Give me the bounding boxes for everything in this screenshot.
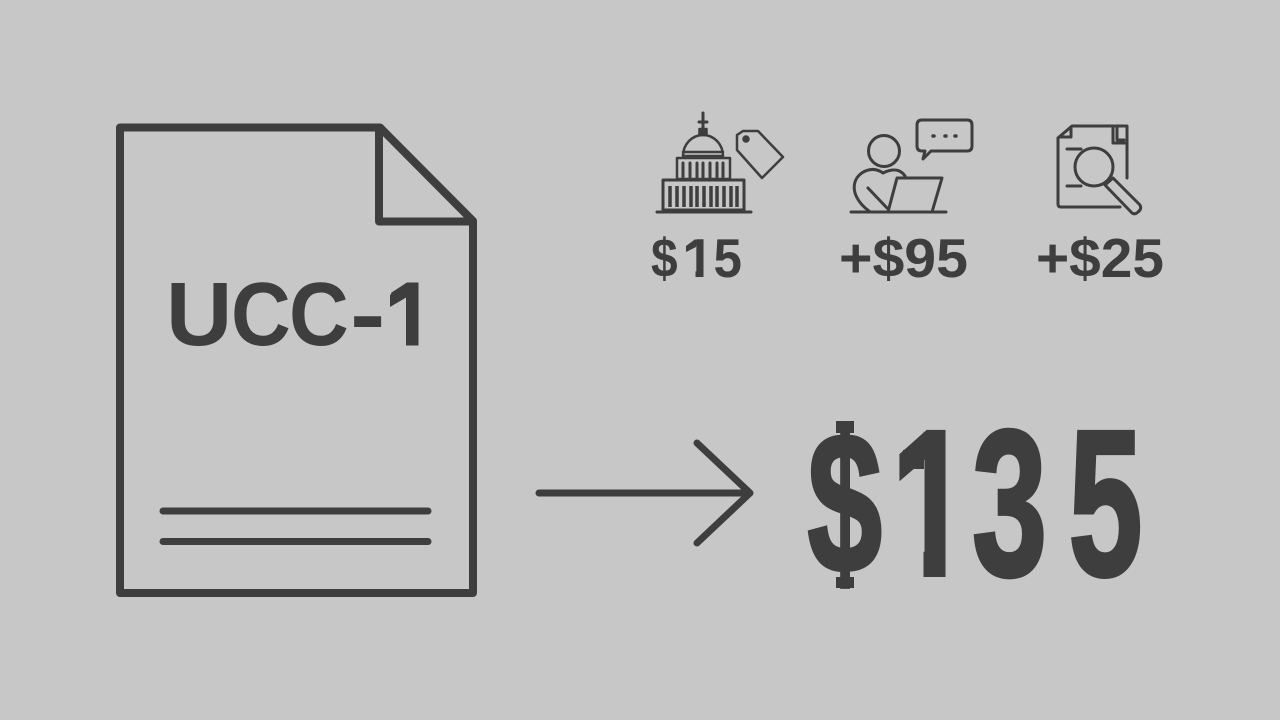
total cost: 5	[1068, 388, 1143, 620]
arrow	[539, 443, 750, 543]
document title: 1	[386, 265, 436, 365]
infographic canvas	[116, 112, 1162, 597]
second fee: +$95	[839, 227, 968, 289]
document title	[172, 282, 418, 346]
third fee: +$25	[1036, 227, 1164, 289]
total cost	[808, 421, 1140, 589]
first fee	[652, 236, 740, 281]
document title: C	[231, 265, 291, 365]
document title: U	[166, 265, 232, 365]
total cost: 1	[890, 387, 975, 620]
icon: person at laptop with speech bubble	[851, 120, 972, 212]
document title: -	[350, 264, 385, 364]
document title: C	[289, 265, 349, 365]
first fee: $	[651, 227, 678, 289]
first fee: 5	[714, 228, 742, 289]
icon: capitol building with price tag	[657, 113, 783, 212]
icon: document with magnifying glass	[1058, 126, 1141, 214]
icon: UCC-1 document	[120, 128, 473, 593]
total cost: 3	[972, 388, 1047, 620]
total cost: $	[808, 392, 882, 615]
first fee: 1	[684, 227, 714, 289]
